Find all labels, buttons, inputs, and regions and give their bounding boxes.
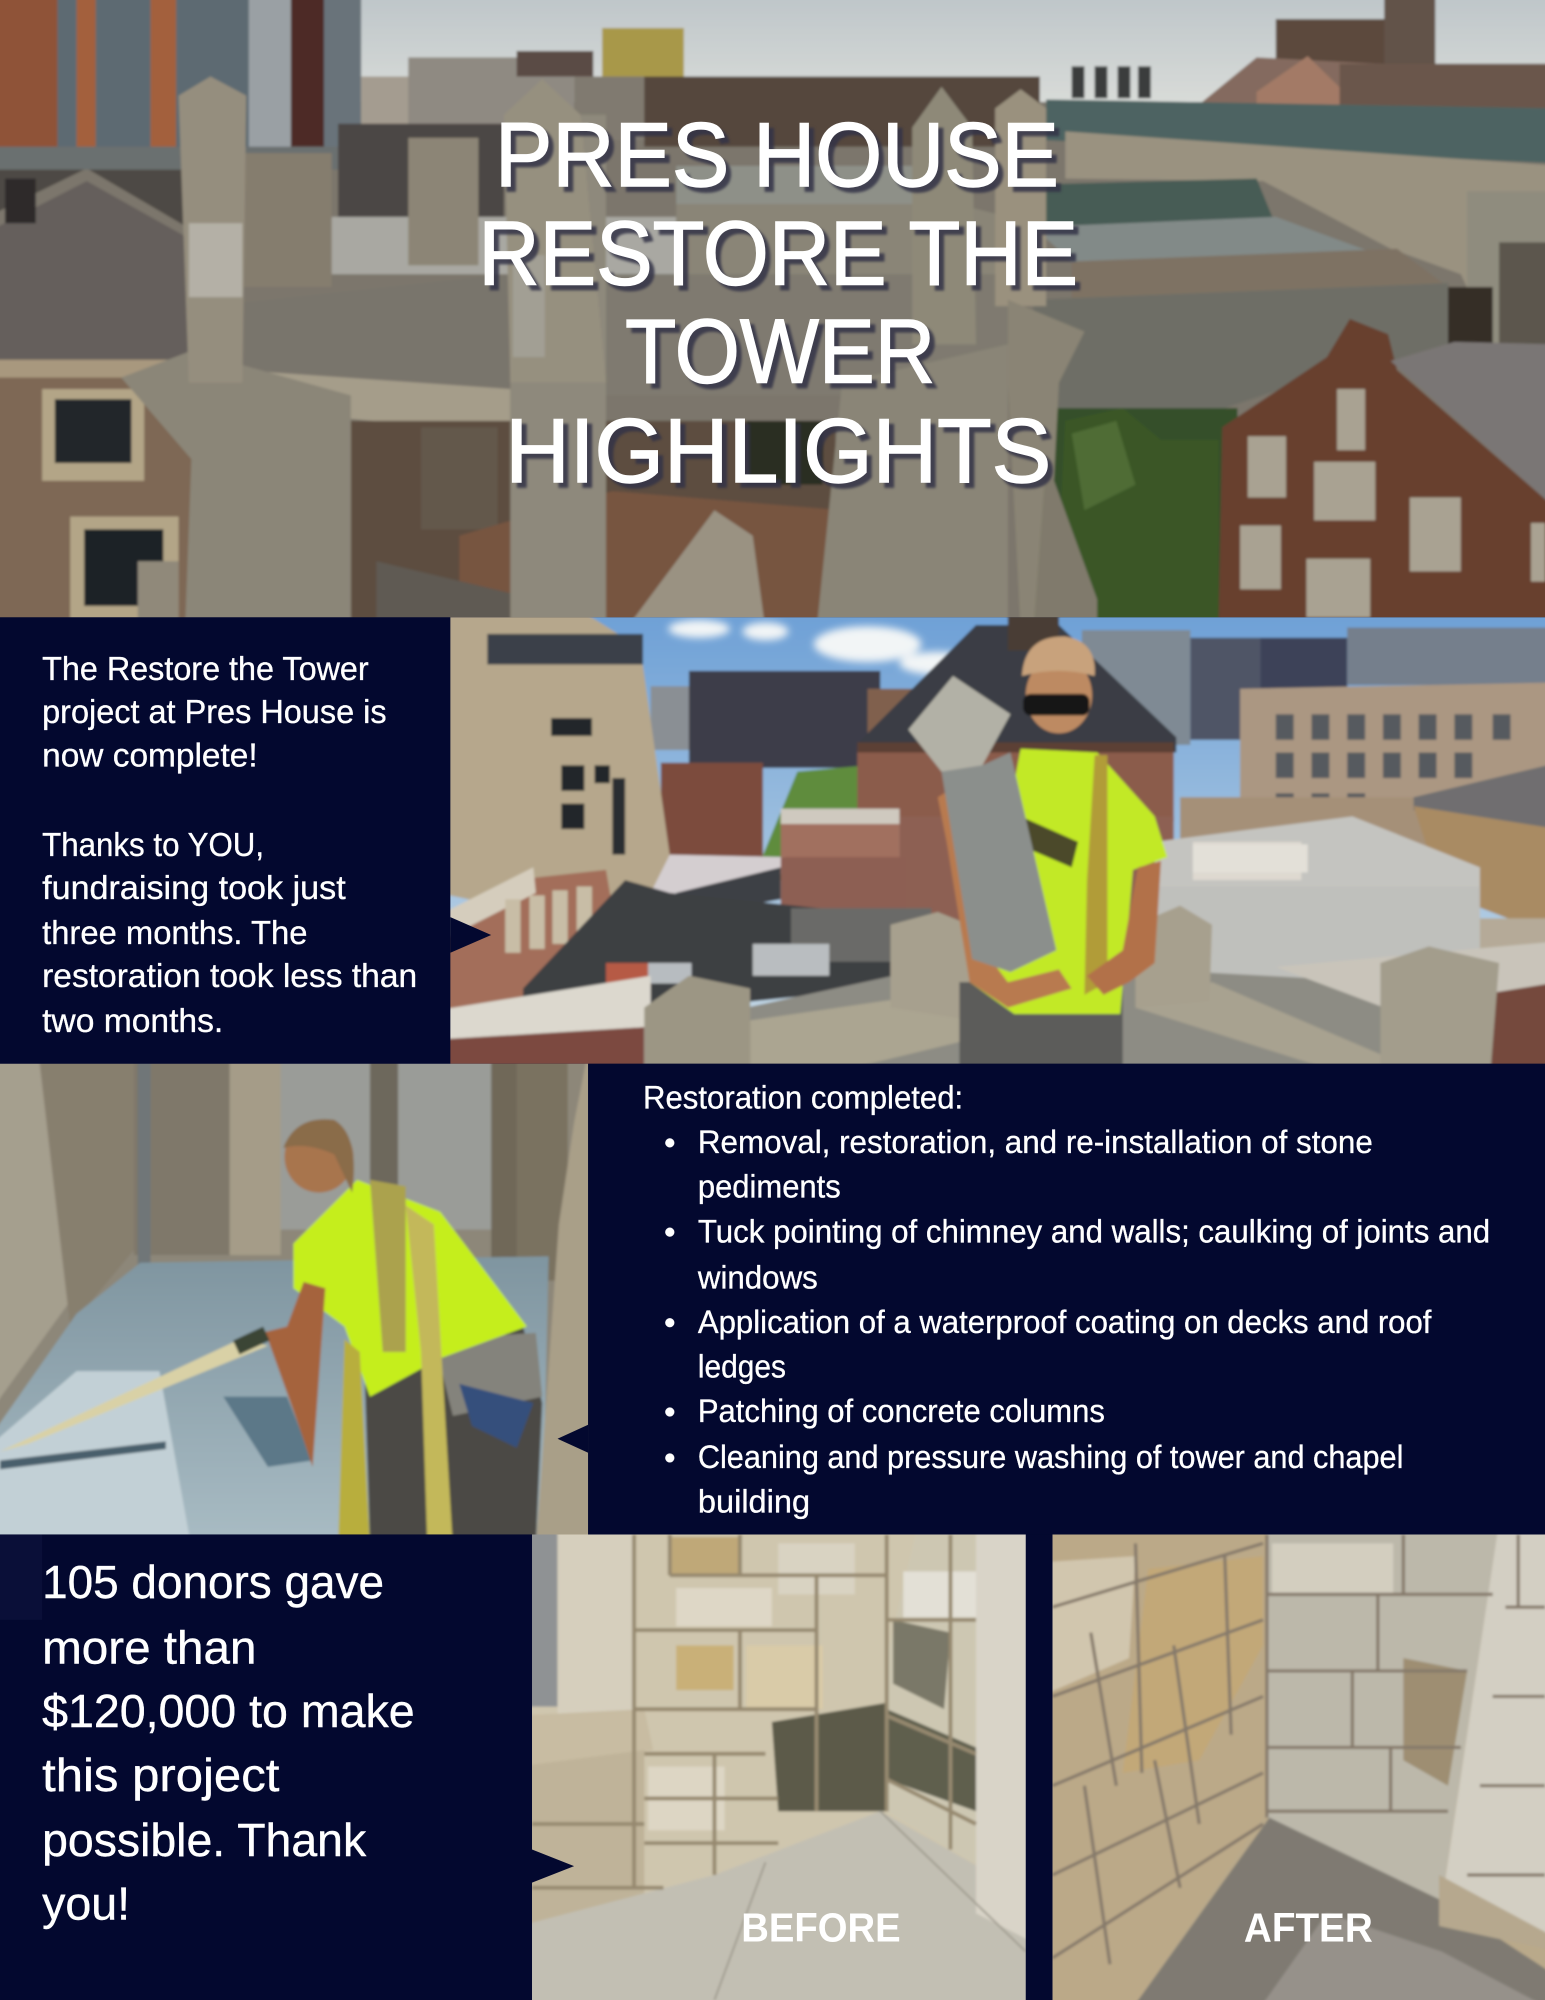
text block: project complete xyxy=(42,651,417,1040)
label: before: BEFORE xyxy=(741,1904,901,1950)
text block: donors message: you! xyxy=(42,1878,130,1930)
text block: donors message: 105 donors gave xyxy=(42,1556,384,1608)
photo: worker applying waterproof coating xyxy=(0,1051,601,1547)
photo: before stone wall xyxy=(519,1522,1039,2000)
text block: project complete: three months. The xyxy=(42,915,307,952)
title: PRES HOUSE xyxy=(495,105,1059,206)
title: RESTORE THE xyxy=(478,203,1078,304)
text block: donors message: possible. Thank xyxy=(42,1814,367,1866)
photo: tower rooftop header xyxy=(0,0,1545,630)
text block: project complete: project at Pres House is xyxy=(42,694,387,731)
bullet list: restoration tasks: Patching of concrete columns xyxy=(698,1393,1105,1429)
bullet list: restoration tasks: Application of a waterproof coating on decks and roof xyxy=(698,1304,1432,1340)
panel: restoration completed list xyxy=(558,1064,1545,1534)
photo: worker holding stone pediment xyxy=(438,605,1545,1077)
arrow: pointer from intro panel to photo xyxy=(450,917,491,953)
bullet list: restoration tasks: pediments xyxy=(698,1169,841,1205)
panel: project complete intro xyxy=(0,617,450,1064)
bullet list: restoration tasks: Tuck pointing of chimney and walls; caulking of joints and xyxy=(698,1213,1490,1249)
arrow: pointer from list panel to photo xyxy=(558,1425,588,1453)
text block: donors message: more than xyxy=(42,1621,256,1673)
title xyxy=(478,105,1078,502)
bullet list: restoration tasks: building xyxy=(698,1484,810,1520)
bullet list: restoration tasks xyxy=(665,1124,1490,1520)
text block: project complete: restoration took less than xyxy=(42,958,417,995)
title: HIGHLIGHTS xyxy=(505,401,1051,502)
bullet list: restoration tasks: ledges xyxy=(698,1349,786,1385)
bullet list: restoration tasks: Removal, restoration, and re-installation of stone xyxy=(698,1124,1373,1160)
bullet list: restoration tasks: Cleaning and pressure washing of tower and chapel xyxy=(698,1439,1403,1475)
text block: donors message: this project xyxy=(42,1749,280,1801)
panel: donors thank you xyxy=(0,1534,532,2000)
text block: project complete: now complete! xyxy=(42,738,258,775)
bullet list: restoration tasks: windows xyxy=(697,1259,818,1295)
text: list heading: Restoration completed: xyxy=(643,1079,963,1115)
text block: project complete: two months. xyxy=(42,1003,223,1040)
title: TOWER xyxy=(625,302,935,403)
text block: project complete: Thanks to YOU, xyxy=(42,827,264,864)
text block: project complete: fundraising took just xyxy=(42,870,346,907)
label: after: AFTER xyxy=(1244,1904,1373,1950)
text block: donors message: $120,000 to make xyxy=(42,1685,415,1737)
text block: project complete: The Restore the Tower xyxy=(42,651,369,688)
arrow: pointer from donors panel to before photo xyxy=(532,1849,574,1883)
photo: after stone wall xyxy=(1040,1522,1545,2000)
text block: donors message xyxy=(42,1556,415,1930)
